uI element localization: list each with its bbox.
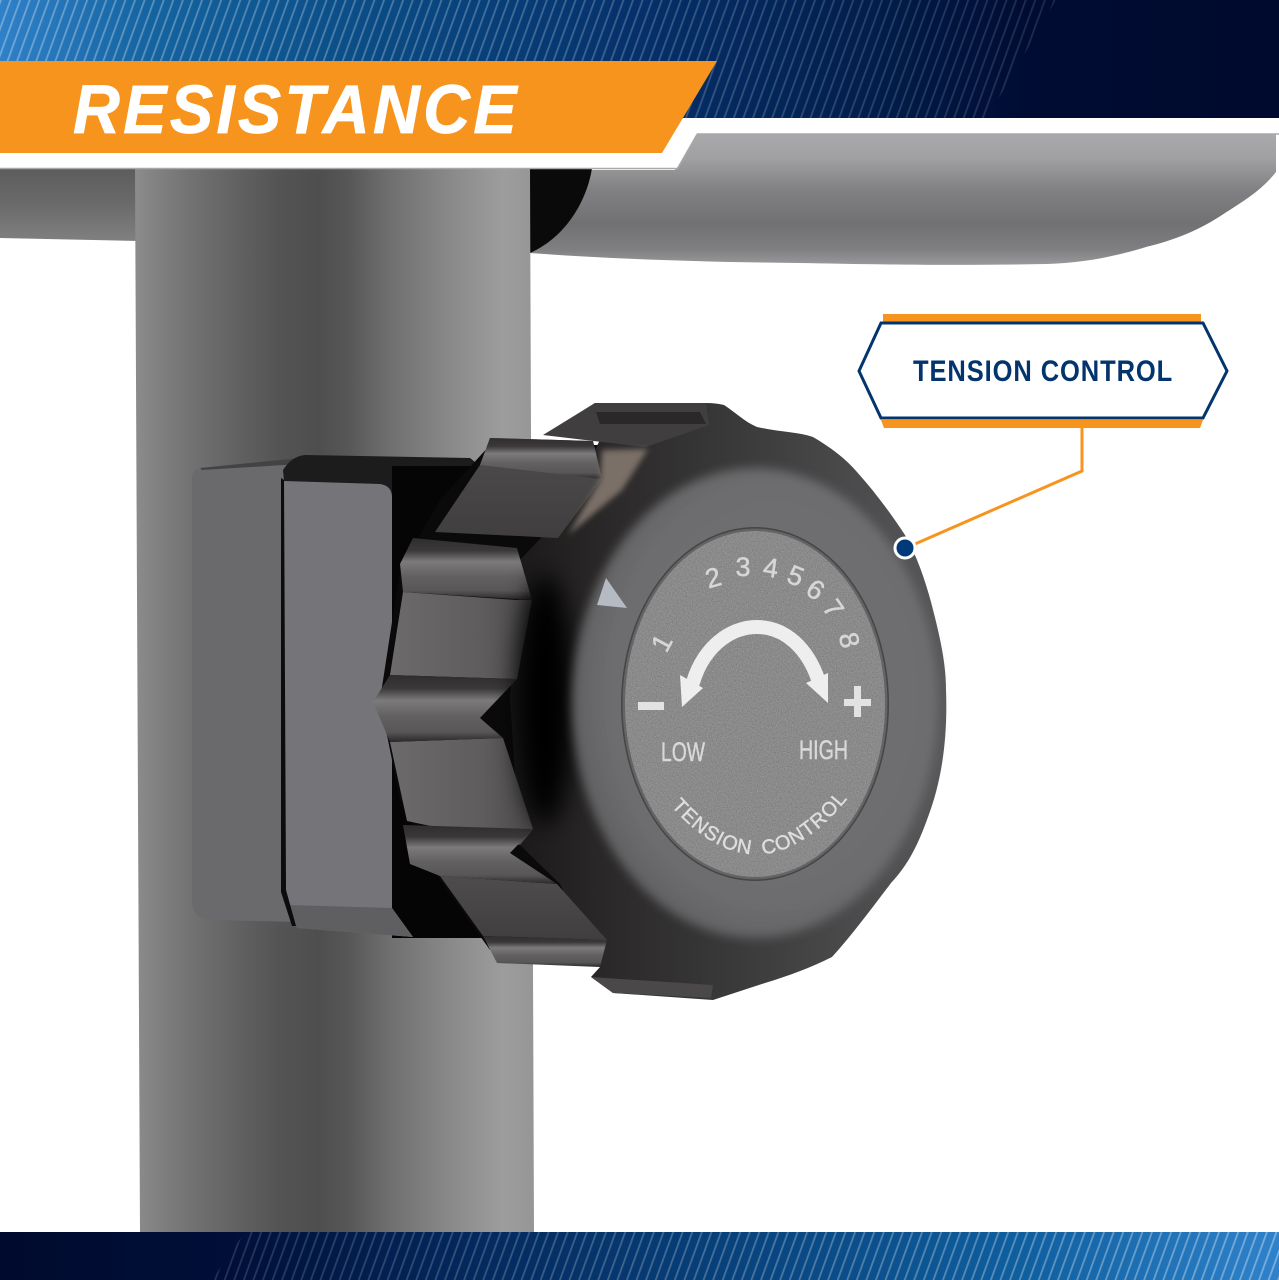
dial numbers: 5 <box>783 559 808 593</box>
dial numbers <box>645 552 865 657</box>
white banner trim <box>0 118 1279 168</box>
handlebar <box>530 134 1276 265</box>
knob face <box>572 468 938 938</box>
vertical post <box>135 168 534 1233</box>
dial numbers: 7 <box>817 594 850 623</box>
dial numbers: 8 <box>833 629 865 651</box>
orange title ribbon <box>0 61 717 153</box>
pointer triangle <box>597 578 627 608</box>
bottom banner <box>0 1232 1279 1280</box>
plus sign <box>844 686 871 717</box>
dial numbers: 6 <box>801 573 830 606</box>
dial numbers: 2 <box>702 561 725 594</box>
title: RESISTANCE <box>73 71 519 148</box>
knob shoulder highlight <box>568 449 648 535</box>
callout anchor dot <box>895 538 915 558</box>
left crossbar <box>0 168 140 241</box>
dial numbers: 4 <box>761 552 780 584</box>
dial curved caption: TENSION CONTROL <box>674 796 848 854</box>
dial numbers: 1 <box>645 629 679 657</box>
knob grip ridges <box>373 403 713 998</box>
callout text: TENSION CONTROL <box>913 354 1172 387</box>
callout label <box>859 314 1227 428</box>
knob shadow crescent <box>517 575 573 825</box>
minus sign <box>638 702 664 710</box>
top banner <box>0 0 1279 119</box>
clamp housing <box>192 455 492 938</box>
knob shell <box>510 403 946 1000</box>
callout leader line <box>915 428 1082 544</box>
dial numbers: 3 <box>735 552 751 582</box>
high label: HIGH <box>799 735 848 765</box>
dial disc <box>621 527 889 881</box>
direction arrow <box>680 627 828 707</box>
tension knob <box>376 403 946 1000</box>
low label: LOW <box>661 737 705 767</box>
